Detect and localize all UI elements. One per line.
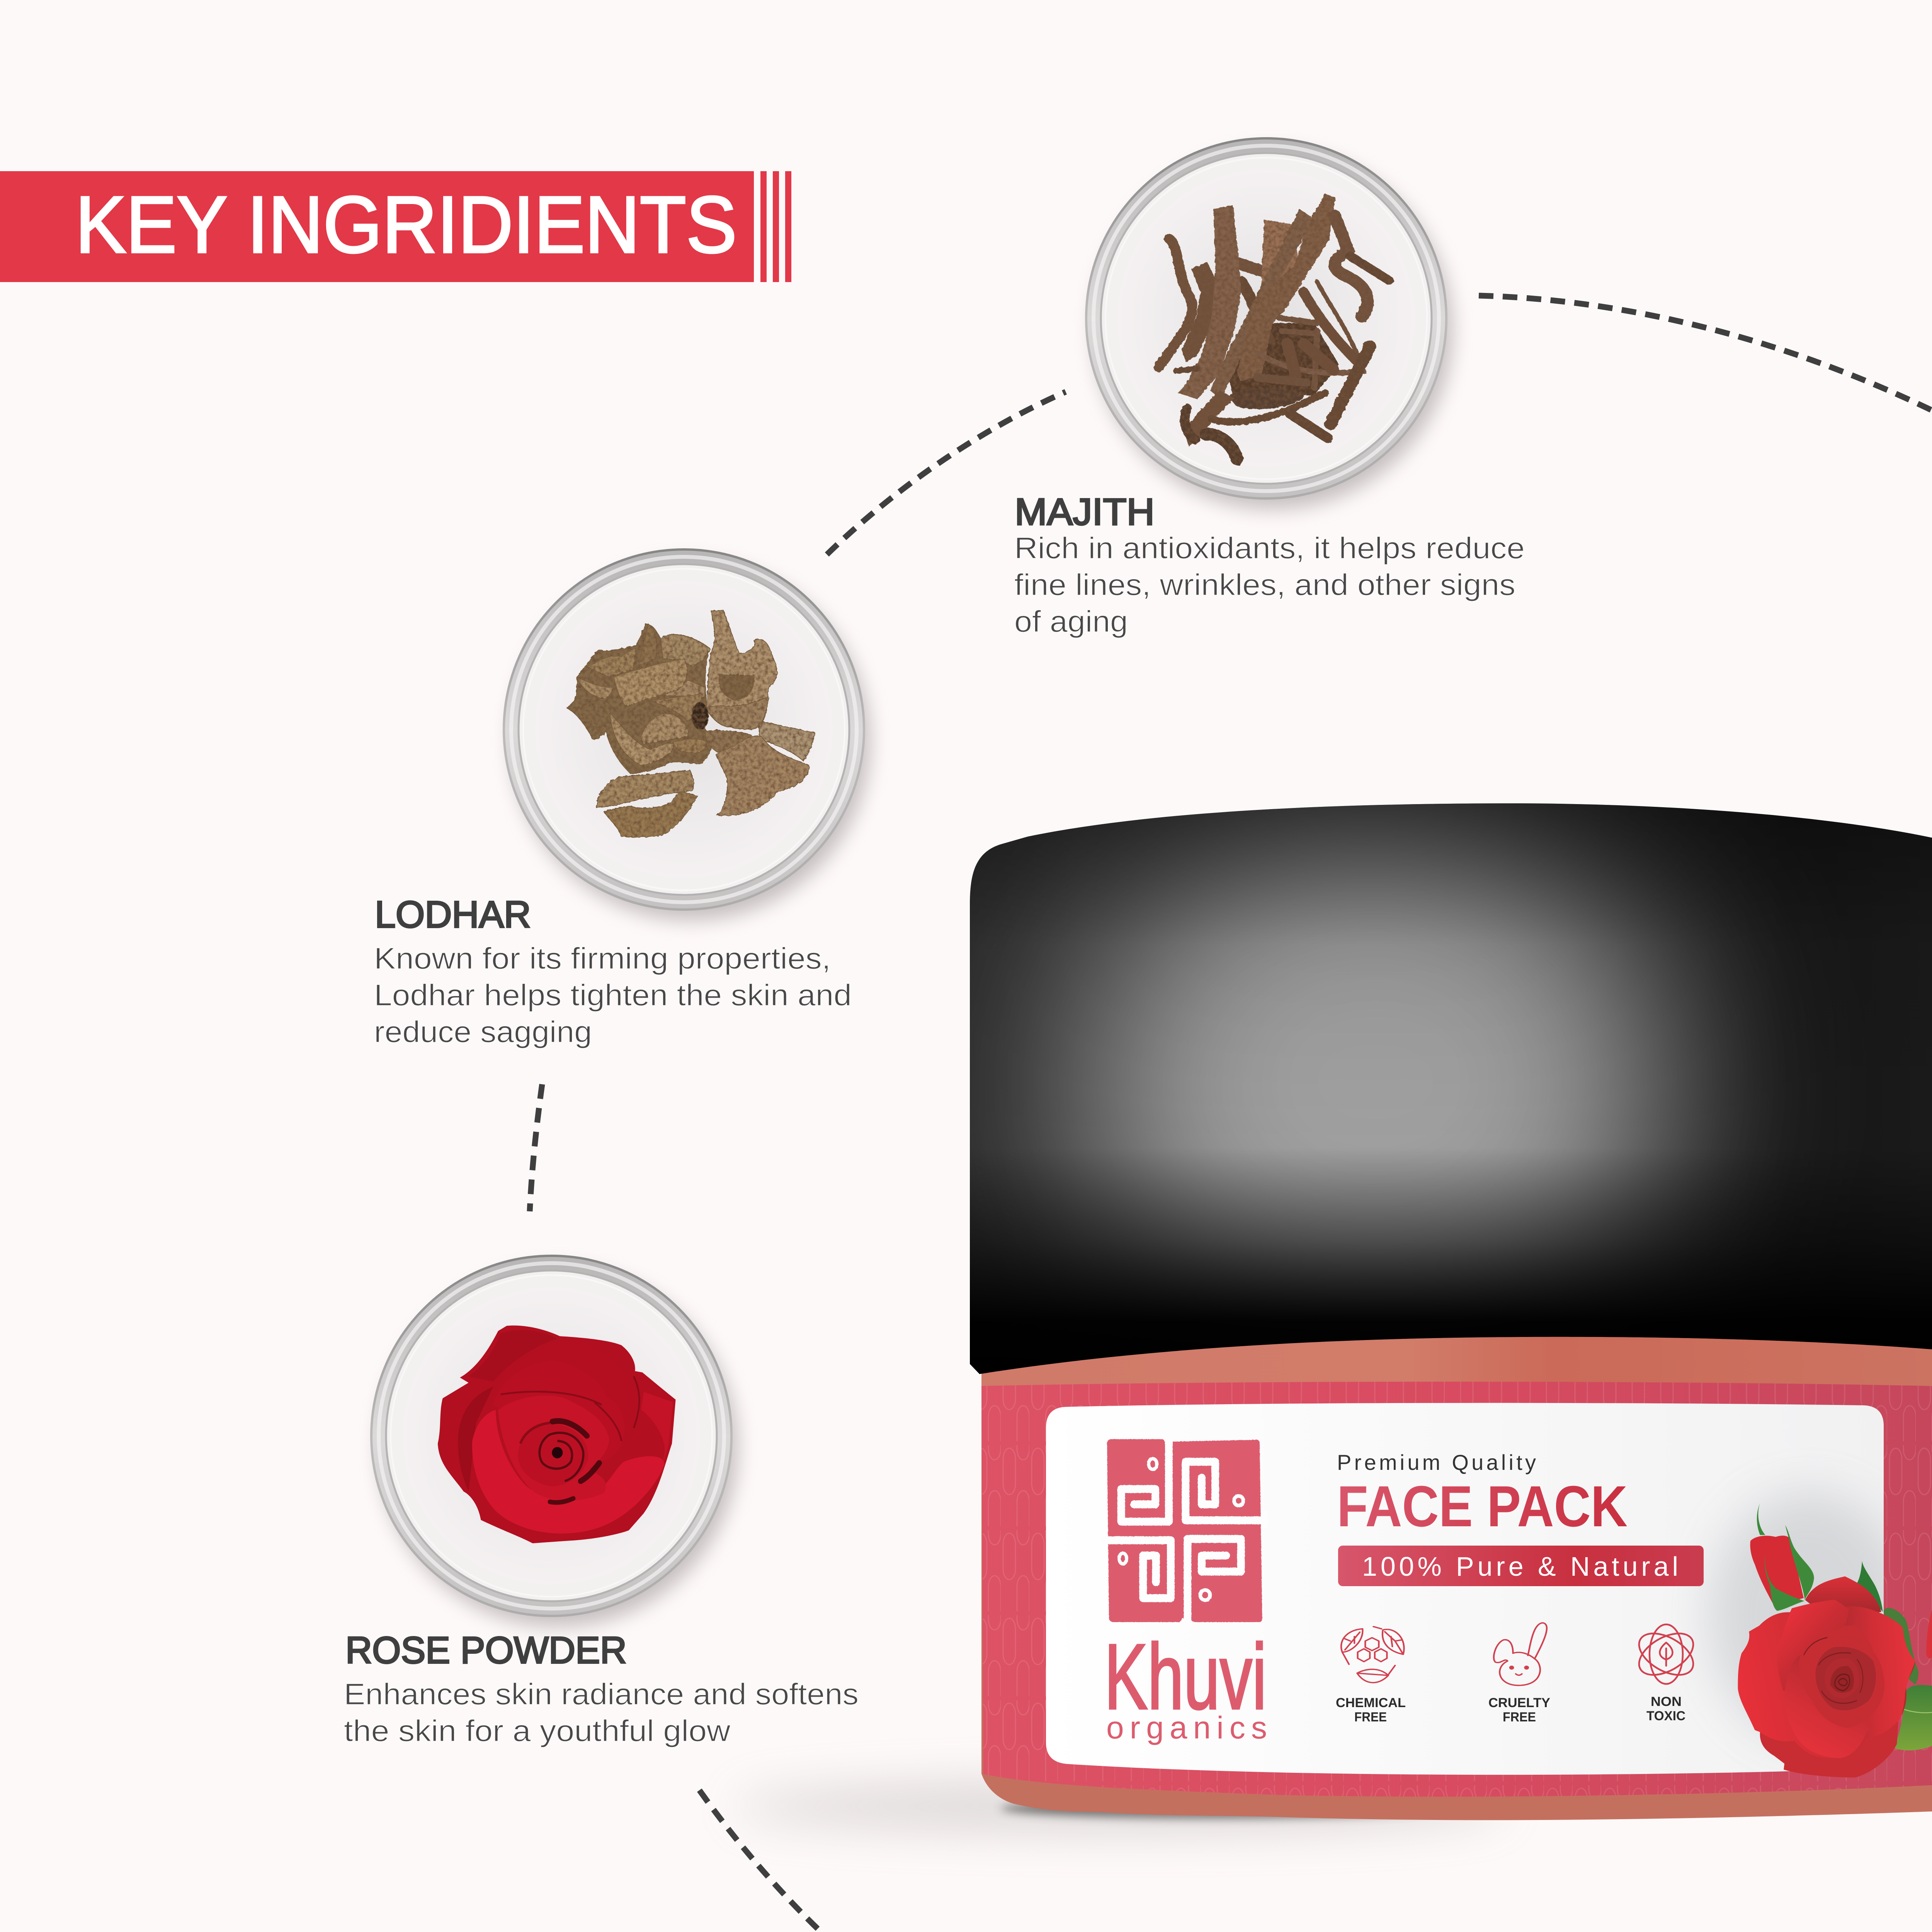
floor shadow [734,1783,1507,1830]
panel: majith dish [1086,138,1452,509]
icon: lodhar chips [567,610,815,837]
rose shadow on label [1708,1492,1909,1739]
icon captions: NON [1651,1694,1682,1709]
dashed arc: lodhar to rose [530,1084,542,1211]
icon: chemical free [1341,1627,1404,1683]
pattern band [981,1382,1932,1797]
logo text: Khuvi [1104,1625,1267,1728]
panel: lodhar dish [504,549,870,920]
product text: Premium Quality [1337,1450,1536,1475]
text block: majith: fine lines, wrinkles, and other signs [1014,568,1515,602]
text block: lodhar [374,893,852,1049]
icon captions [1336,1694,1685,1725]
dashed arc: majith to lodhar [827,392,1066,554]
text block: majith: Rich in antioxidants, it helps reduce [1014,531,1525,565]
logo: khuvi mark [1104,1437,1267,1626]
product text: FACE PACK [1337,1474,1628,1539]
text block: rose powder: ROSE POWDER [345,1629,627,1671]
text block: lodhar: LODHAR [375,893,531,935]
text block: rose powder: the skin for a youthful glow [344,1714,731,1748]
icon: non toxic [1632,1624,1700,1684]
text block: lodhar: Lodhar helps tighten the skin and [374,978,852,1012]
black lid [966,800,1932,1379]
icon captions: FREE [1354,1710,1387,1725]
dashed arc: bottom [699,1790,823,1932]
icon captions: TOXIC [1646,1709,1685,1723]
badge: 100% pure and natural: 100% Pure & Natural [1362,1551,1678,1582]
text block: lodhar: Known for its firming properties, [374,941,831,975]
illustration: rose on label [1738,1503,1932,1777]
icon captions: FREE [1503,1710,1536,1725]
text block: lodhar: reduce sagging [374,1015,592,1049]
text block: rose powder: Enhances skin radiance and softens [344,1677,859,1711]
jar product [734,800,1932,1830]
logo text [1104,1625,1267,1745]
badge: 100% pure and natural [1338,1546,1704,1586]
logo text: organics [1106,1710,1267,1745]
banner: key ingridients: KEY INGRIDIENTS [75,180,737,270]
text block: majith: of aging [1014,604,1128,638]
jar upper glass [981,1314,1932,1391]
icon: red rose [438,1325,676,1543]
icon: majith roots [1158,194,1389,459]
icon captions: CHEMICAL [1336,1696,1406,1710]
icon: cruelty free [1494,1623,1547,1685]
icon captions: CRUELTY [1488,1696,1550,1710]
jar body [981,1314,1932,1820]
text block: majith [1014,491,1525,638]
text block: majith: MAJITH [1015,491,1155,533]
dashed arc: right of majith [1479,296,1932,410]
text block: rose powder [344,1629,859,1748]
product text [1337,1450,1628,1539]
white label [1046,1403,1884,1775]
panel: rose dish [371,1256,738,1627]
